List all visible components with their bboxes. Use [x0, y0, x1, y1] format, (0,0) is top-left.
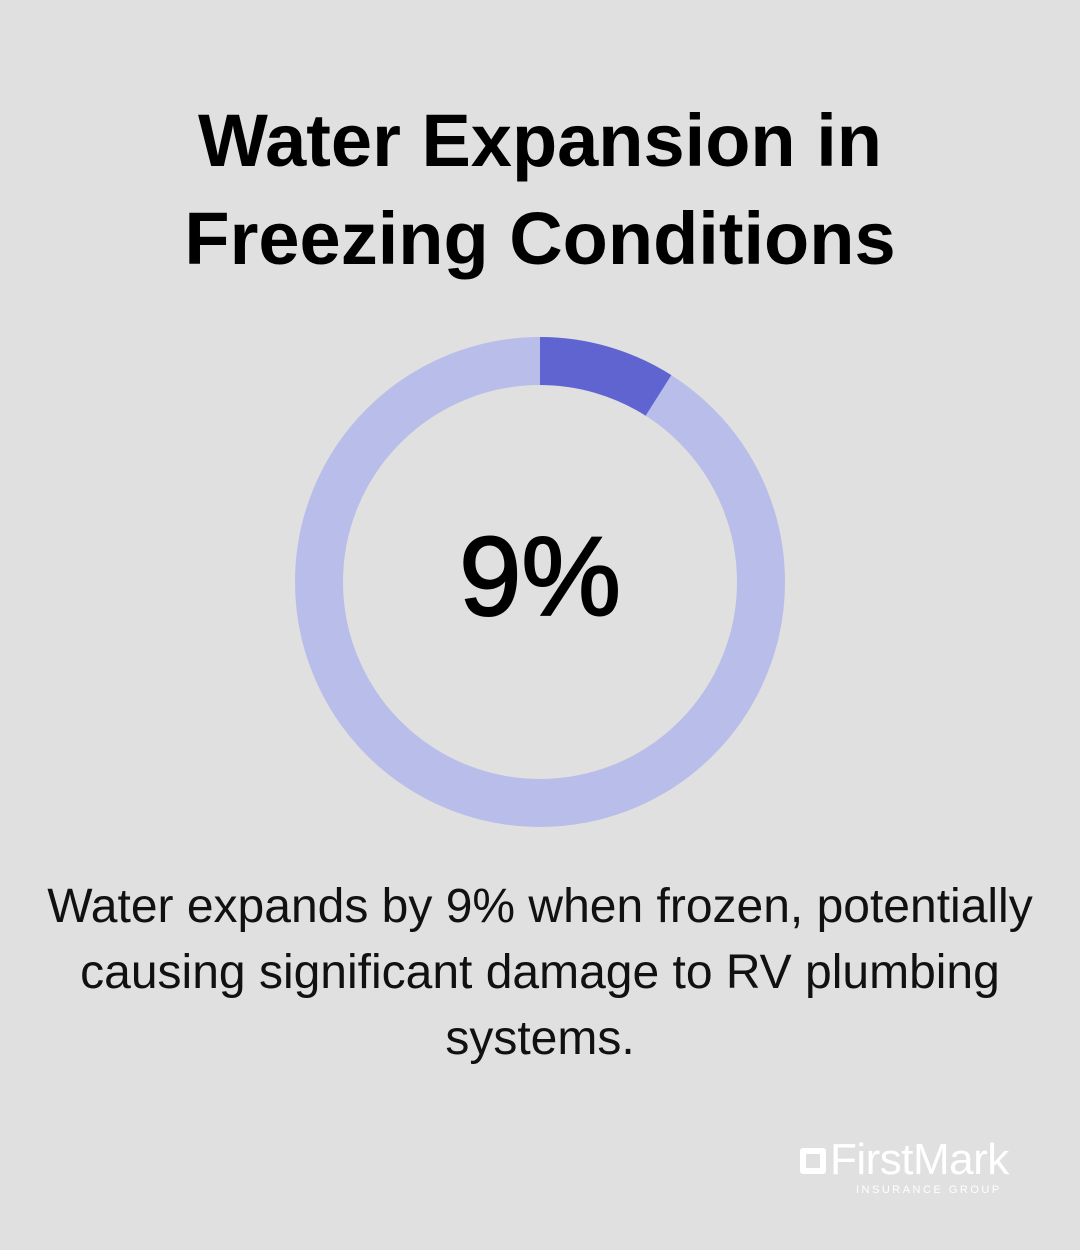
logo: INSURANCE GROUP	[856, 1184, 1002, 1196]
title: Water Expansion in	[198, 99, 882, 182]
donut chart: 9%	[459, 514, 621, 639]
description: causing significant damage to RV plumbing	[80, 946, 1000, 999]
title	[184, 99, 896, 280]
description: Water expands by 9% when frozen, potentially	[47, 880, 1033, 933]
logo	[800, 1135, 1009, 1196]
description: systems.	[445, 1012, 635, 1065]
logo: FirstMark	[830, 1135, 1009, 1184]
description	[47, 880, 1033, 1065]
title: Freezing Conditions	[184, 197, 896, 280]
